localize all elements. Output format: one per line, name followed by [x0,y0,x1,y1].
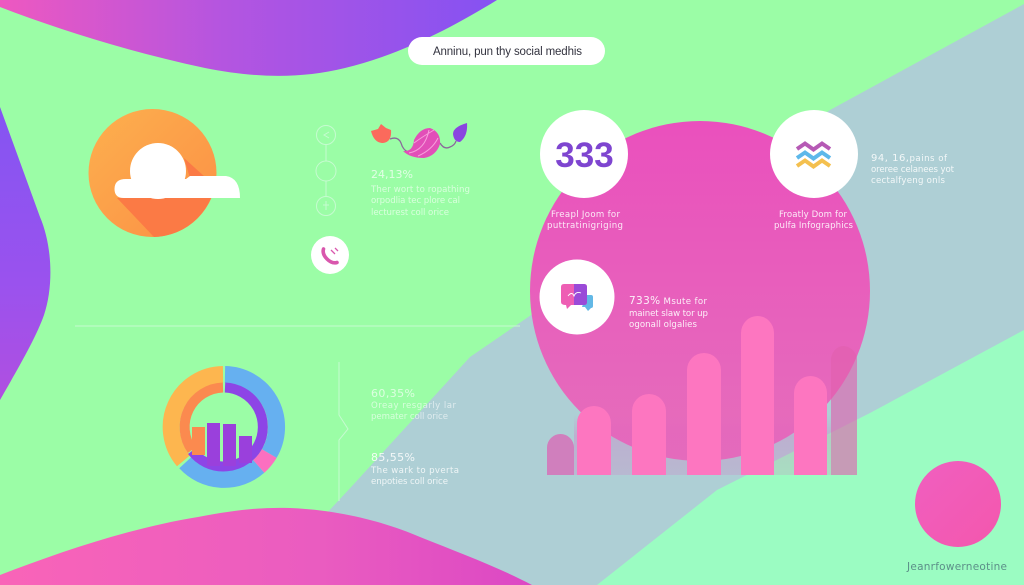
icon: phone [311,236,349,274]
stat: 94,16 [871,153,955,186]
stat: 60,35%: Oreay resgarly lar [371,401,456,411]
stat: 85,55% [370,451,459,487]
background band: mint corner [597,330,1024,585]
icon: chat bubbles [540,260,614,334]
stat: 85,55%: The wark to pverta [370,466,459,476]
stat: 94,16: 94, 16,pains of [871,153,948,164]
vertical arrow divider [339,362,348,501]
title pill: Anninu, pun thy social medhis [433,46,582,58]
stat: 24,13%: 24,13% [371,168,413,181]
icon: waves [770,110,858,198]
stat: 733%: ogonall olgalies [629,320,698,330]
circle: 333 [540,110,628,198]
caption: waves: Froatly Dom for [779,210,847,220]
title pill [408,37,605,65]
big pink circle [530,121,870,461]
stat: 94,16: oreree celanees yot [871,165,955,175]
stat: 733% [629,295,708,330]
bars in donut [192,423,252,466]
icon: flower and leaf vine [371,123,467,158]
caption: 333 [547,210,623,231]
stat: 85,55%: enpoties coll orice [371,477,448,487]
stat: 60,35% [371,387,456,422]
caption: 333: puttratinigriging [547,221,623,231]
stat: 94,16: cectalfyeng onls [871,176,946,186]
stat: 733%: mainet slaw tor up [629,309,708,319]
stat: 85,55%: 85,55% [371,451,415,464]
stat: 60,35%: 60,35% [371,387,415,400]
bar chart [547,316,857,475]
stat: 24,13% [370,168,470,218]
caption: waves [774,210,854,231]
caption: 333: Freapl Joom for [551,210,620,220]
stat: 60,35%: pemater coll orice [371,412,448,422]
left blob [0,107,50,400]
background band: grey-blue [325,4,1024,585]
icon: sun and cloud [88,109,240,237]
stat: 24,13%: orpodlia tec plore cal [371,196,460,206]
caption: waves: pulfa Infographics [774,221,854,231]
stat: 733%: 733% Msute for [629,295,707,307]
watermark: Jeanrfowerneotine [906,561,1007,573]
divider [75,325,520,327]
top blob [0,0,497,76]
stat: 24,13%: Ther wort to ropathing [370,185,470,195]
circle: 333: 333 [555,136,614,175]
stat: 24,13%: lecturest coll orice [371,208,449,218]
bottom blob [0,508,532,585]
donut chart [171,374,277,479]
pink circle bottom right [915,461,1001,547]
timeline icons [316,126,336,216]
